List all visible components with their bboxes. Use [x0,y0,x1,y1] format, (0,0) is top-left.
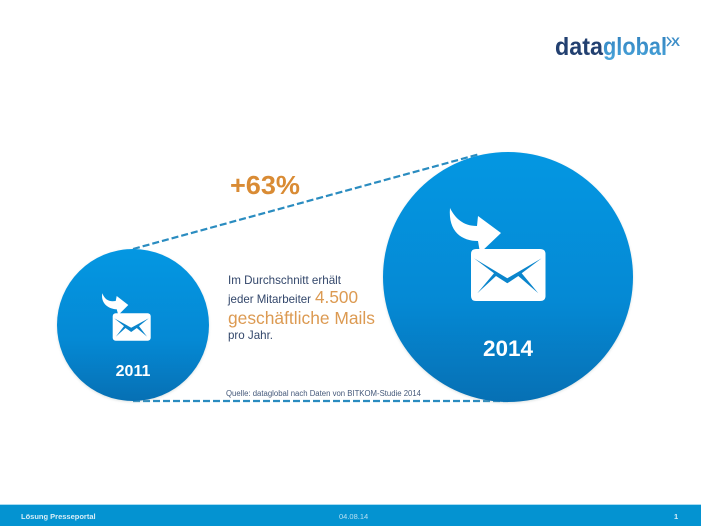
text block: average mails: jeder Mitarbeiter [227,293,311,306]
growth percentage: +63% [230,170,300,200]
text block: average mails: 4.500 [315,287,358,307]
circle 2011 [57,249,209,402]
circle 2014 [383,152,633,403]
dashed growth line top [133,154,480,249]
source note: Quelle: dataglobal nach Daten von BITKOM-Studie 2014 [226,389,422,398]
text block: average mails [227,274,375,342]
label 2011: 2011 [116,363,150,380]
logo: dataglobal: global [603,33,667,61]
icon: mail with arrow 2014 [450,208,546,301]
footer page number: 1 [674,512,678,521]
icon: mail with arrow 2011 [102,293,151,341]
text block: average mails: pro Jahr. [228,329,273,342]
dashed baseline bottom [133,400,508,402]
text block: average mails: geschäftliche Mails [228,308,375,328]
logo: dataglobal: X [671,35,680,49]
footer left label: Lösung Presseportal [21,512,96,521]
logo: dataglobal: data [555,33,604,61]
logo: dataglobal [555,33,680,61]
footer date: 04.08.14 [339,512,368,521]
footer bar [0,504,701,526]
text block: average mails: Im Durchschnitt erhält [228,274,342,287]
label 2014: 2014 [483,336,534,361]
